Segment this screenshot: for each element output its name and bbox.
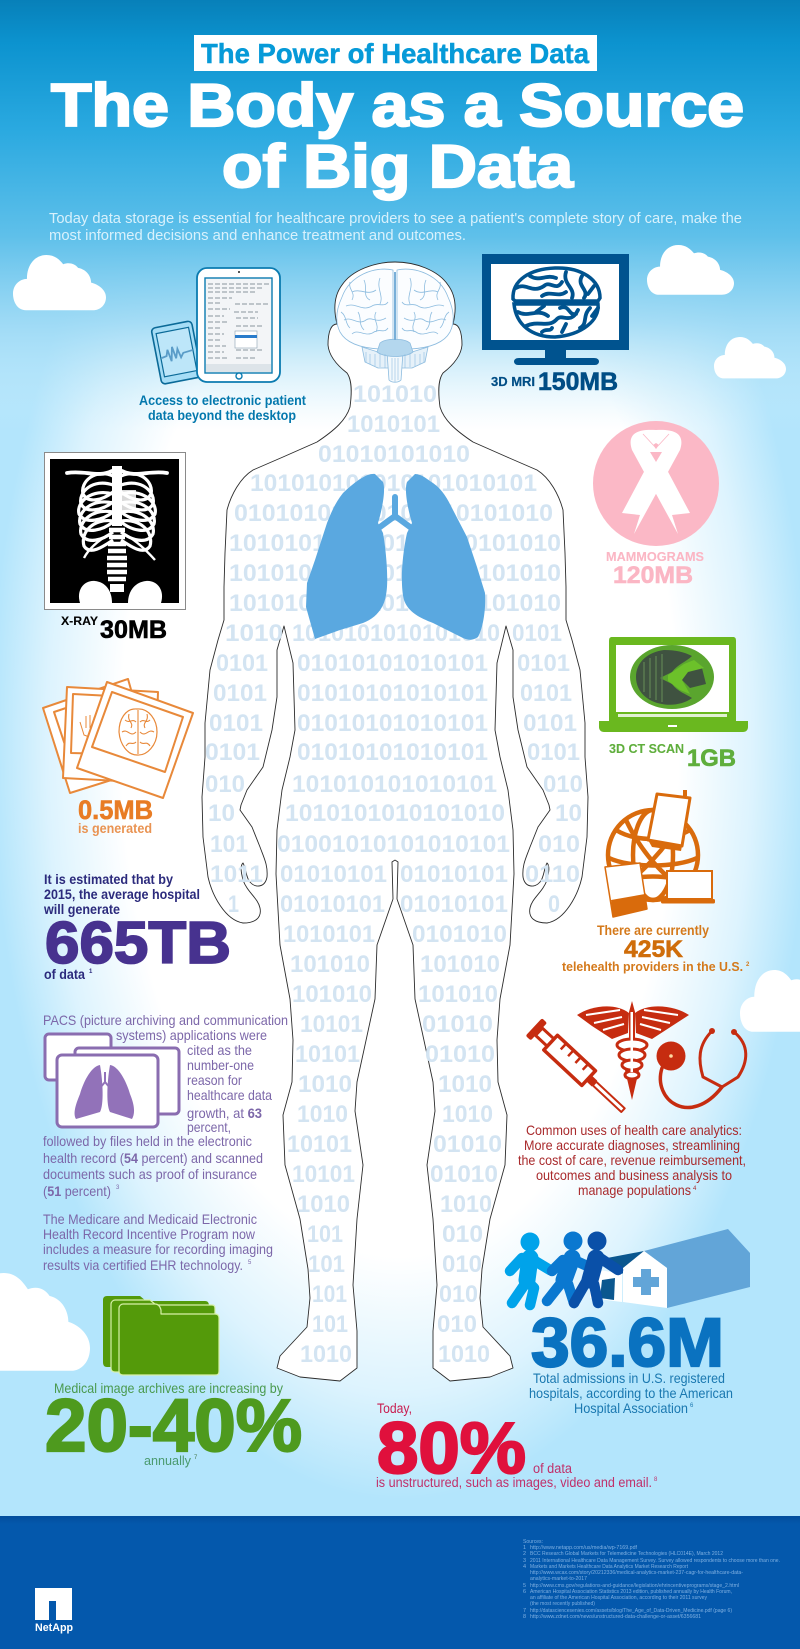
- stat: 665TB: 2015, the average hospital: [44, 887, 200, 902]
- binary code inside body: 0101: [512, 620, 562, 647]
- binary code inside body: 1010101010101010: [285, 800, 505, 827]
- label: 0.5MB is generated: 0.5MB: [78, 795, 153, 825]
- stat: 665TB: [43, 872, 231, 982]
- stat: 80% unstructured: 80%: [377, 1409, 526, 1489]
- binary code inside body: 0101010: [412, 921, 507, 948]
- footer band: [0, 1516, 800, 1649]
- text: health care analytics: outcomes and business analysis to: [536, 1167, 732, 1183]
- binary code inside body: [205, 381, 583, 1368]
- binary code inside body: 10: [208, 800, 235, 827]
- binary code inside body: 0101: [205, 739, 260, 766]
- binary code inside body: 0101: [209, 710, 263, 737]
- binary code inside body: 0: [548, 891, 560, 918]
- icon: syringe: [526, 1018, 631, 1119]
- binary code inside body: 010: [437, 1311, 477, 1338]
- binary code inside body: 1: [228, 891, 239, 918]
- binary code inside body: 101010101010101010101010: [229, 560, 561, 587]
- label: 3D CT scan 1GB: 3D CT SCAN: [609, 742, 684, 756]
- sources list: Markets and Markets Healthcare Data Analytics Market Research Report: [530, 1564, 688, 1570]
- binary code inside body: 1010101: [347, 411, 440, 438]
- sources list: http://www.zdnet.com/news/unstructured-data-challenge-or-asset/6356681: [530, 1614, 701, 1620]
- sources list: (the most recently published): [530, 1601, 595, 1607]
- sources list: http://www.wcax.com/story/20212336/medical-analytics-market-237-cagr-for-healthcare-data-: [530, 1570, 743, 1576]
- main heading: of Big Data: [222, 133, 574, 200]
- binary code inside body: 01010: [422, 1011, 493, 1038]
- caption: electronic patient data: data beyond the desktop: [148, 408, 296, 423]
- binary code inside body: 0101: [216, 650, 268, 677]
- stat: 36.6M admissions: Total admissions in U.S. registered: [533, 1370, 725, 1386]
- stat: image archives 20-40%: annually: [144, 1453, 191, 1468]
- sources list: Sources:: [523, 1539, 543, 1545]
- binary code inside body: 01010101010101: [297, 680, 488, 707]
- binary code inside body: 10: [555, 800, 582, 827]
- icon: tablets with patient data: [151, 268, 280, 384]
- binary code inside body: 01010101010101: [297, 739, 488, 766]
- sources list: [523, 1539, 780, 1620]
- lungs: [306, 474, 485, 640]
- binary code inside body: 01010101: [400, 891, 508, 918]
- label: mammograms 120MB: [606, 550, 704, 589]
- text: health care analytics: manage populations: [578, 1182, 691, 1198]
- sources list: 2011 International Healthcare Data Management Survey. Survey allowed respondents to choose more than one.: [530, 1558, 780, 1564]
- brain in head: [337, 269, 453, 382]
- binary code inside body: 101010: [353, 381, 437, 408]
- label: 3D CT scan 1GB: [609, 742, 736, 772]
- binary code inside body: 010: [205, 771, 245, 798]
- binary code inside body: 0101: [523, 710, 577, 737]
- icon: green folders: [103, 1296, 219, 1375]
- stat: image archives 20-40%: Medical image archives are increasing by: [54, 1380, 283, 1396]
- sources list: 4: [523, 1564, 526, 1570]
- sources list: BCC Research Global Markets for Telemedicine Technologies (HLC014E), March 2012: [530, 1551, 723, 1557]
- label: X-RAY 30MB: [61, 614, 167, 644]
- binary code inside body: 01010: [430, 1161, 498, 1188]
- binary code inside body: 101010101010101010101010: [229, 590, 561, 617]
- binary code inside body: 1010101010101010: [292, 620, 500, 647]
- text: Medicare and Medicaid program: 5: [248, 1260, 252, 1266]
- binary code inside body: 0101: [213, 680, 267, 707]
- label: 3D MRI 150MB: 3D MRI: [491, 374, 535, 389]
- binary code inside body: 0101: [527, 739, 580, 766]
- sources list: analytics-market-to-2017: [530, 1576, 587, 1582]
- text: PACS applications: followed by files held in the electronic: [43, 1133, 252, 1149]
- binary code inside body: 1011: [210, 861, 263, 888]
- binary code inside body: 101010: [418, 981, 498, 1008]
- main heading: The Body as a Source: [51, 72, 744, 139]
- stat: 36.6M admissions: Hospital Association: [574, 1400, 688, 1416]
- label: 425K telehealth providers: There are currently: [597, 923, 709, 938]
- sources list: 7: [523, 1608, 526, 1614]
- stat: image archives 20-40%: 20-40%: [45, 1384, 302, 1467]
- binary code inside body: 01010101010: [318, 441, 470, 468]
- binary code inside body: 010: [442, 1221, 483, 1248]
- binary code inside body: 010: [442, 1251, 482, 1278]
- stat: 665TB: 1: [89, 969, 93, 975]
- binary code inside body: 1010: [300, 1341, 352, 1368]
- text: Medicare and Medicaid program: [43, 1211, 273, 1273]
- label: mammograms 120MB: 120MB: [613, 562, 693, 589]
- binary code inside body: 101: [307, 1221, 343, 1248]
- binary code inside body: 1010: [298, 1071, 352, 1098]
- title tag: The Power of Healthcare Data: [201, 38, 589, 69]
- binary code inside body: 01001010101010101: [277, 831, 510, 858]
- binary code inside body: 01010101010101: [297, 650, 488, 677]
- icon: scan photos: [43, 679, 193, 798]
- label: 3D MRI 150MB: [491, 368, 618, 396]
- caption: electronic patient data: [139, 393, 306, 423]
- sources list: http://www.cms.gov/regulations-and-guidance/legislation/ehrincentiveprograms/stage_2.html: [530, 1583, 739, 1589]
- stat: 36.6M admissions: hospitals, according to the American: [529, 1385, 733, 1401]
- label: 425K telehealth providers: 2: [746, 962, 750, 968]
- cloud: right edge: [740, 970, 800, 1032]
- binary code inside body: 101: [312, 1281, 347, 1308]
- intro text: most informed decisions and enhance treatment and outcomes.: [49, 228, 466, 244]
- icon: CT scan laptop: [599, 637, 748, 732]
- binary code inside body: 1010: [440, 1191, 492, 1218]
- text: PACS applications: growth, at 63: [187, 1105, 262, 1121]
- label: 425K telehealth providers: telehealth providers in the U.S.: [562, 959, 743, 974]
- stat: image archives 20-40%: 7: [194, 1455, 198, 1461]
- label: 425K telehealth providers: 425K: [624, 936, 684, 963]
- icon: hospital and patients: [510, 1229, 750, 1308]
- sources list: 2: [523, 1551, 526, 1557]
- binary code inside body: 01010101: [280, 861, 387, 888]
- text: PACS applications: number-one: [187, 1057, 254, 1073]
- binary code inside body: 01010101010101: [297, 710, 488, 737]
- sources list: 6: [523, 1589, 526, 1595]
- binary code inside body: 101010101010101: [292, 771, 497, 798]
- stat: 665TB: It is estimated that by: [44, 872, 173, 887]
- main heading: [51, 72, 744, 200]
- sources list: 8: [523, 1614, 526, 1620]
- text: health care analytics: More accurate diagnoses, streamlining: [524, 1137, 740, 1153]
- binary code inside body: 101010: [290, 951, 370, 978]
- intro text: [49, 211, 742, 244]
- binary code inside body: 10101: [295, 1041, 360, 1068]
- stat: 36.6M admissions: 36.6M: [531, 1304, 724, 1381]
- icon: caduceus: [577, 1001, 689, 1100]
- sources list: 5: [523, 1583, 526, 1589]
- icon: stethoscope: [656, 1028, 746, 1107]
- label: 0.5MB is generated: is generated: [78, 821, 152, 836]
- icon: lung image cards: [45, 1034, 179, 1127]
- sources list: an affiliate of the American Hospital Association, according to their 2011 survey: [530, 1595, 707, 1601]
- text: PACS applications: health record (54 percent) and scanned: [43, 1150, 263, 1166]
- text: PACS applications: systems) applications were: [116, 1027, 267, 1043]
- binary code inside body: 1010: [225, 620, 283, 647]
- icon: telehealth globe and devices: [605, 790, 715, 917]
- intro text: Today data storage is essential for healthcare providers to see a patient's complete story of care, make the: [49, 211, 742, 227]
- sources list: http://datasciencesenies.com/assets/blog/The_Age_of_Data-Driven_Medicine.pdf (page 6): [530, 1608, 732, 1614]
- cloud: lower left: [0, 1273, 90, 1371]
- cloud: far right: [714, 337, 786, 378]
- logo: NetApp: NetApp: [35, 1622, 73, 1634]
- text: health care analytics: [518, 1122, 746, 1198]
- text: Medicare and Medicaid program: The Medicare and Medicaid Electronic: [43, 1211, 257, 1227]
- binary code inside body: 101010: [420, 951, 500, 978]
- label: 3D MRI 150MB: 150MB: [538, 368, 618, 396]
- label: mammograms 120MB: MAMMOGRAMS: [606, 550, 704, 564]
- stat: 80% unstructured: 8: [654, 1477, 658, 1483]
- text: Medicare and Medicaid program: includes a measure for recording imaging: [43, 1241, 273, 1257]
- binary code inside body: 1010: [297, 1101, 348, 1128]
- sources list: American Hospital Association Statistics 2013 edition, published annually by Health Forum,: [530, 1589, 732, 1595]
- label: 425K telehealth providers: [562, 923, 750, 974]
- text: PACS applications: 3: [116, 1185, 120, 1191]
- binary code inside body: 010: [439, 1281, 478, 1308]
- text: PACS applications: documents such as proof of insurance: [43, 1166, 257, 1182]
- binary code inside body: 0101: [517, 650, 570, 677]
- text: PACS applications: healthcare data: [187, 1087, 272, 1103]
- human body outline: [202, 262, 588, 1381]
- logo: NetApp: [35, 1588, 73, 1634]
- binary code inside body: 101010: [292, 981, 372, 1008]
- binary code inside body: 10101: [300, 1011, 363, 1038]
- binary code inside body: 01010: [425, 1041, 495, 1068]
- binary code inside body: 1010: [438, 1071, 492, 1098]
- text: Medicare and Medicaid program: Health Record Incentive Program now: [43, 1226, 256, 1242]
- stat: 36.6M admissions: [529, 1304, 733, 1416]
- binary code inside body: 10101: [292, 1161, 355, 1188]
- label: X-RAY 30MB: 30MB: [100, 616, 167, 644]
- binary code inside body: 0110: [525, 861, 580, 888]
- text: health care analytics: Common uses of health care analytics:: [526, 1122, 742, 1138]
- text: PACS applications: cited as the: [187, 1042, 252, 1058]
- binary code inside body: 01010: [433, 1131, 502, 1158]
- binary code inside body: 1010101: [283, 921, 375, 948]
- binary code inside body: 101010101010101010101010: [229, 530, 561, 557]
- stat: 665TB: will generate: [43, 902, 120, 917]
- stat: 665TB: 665TB: [45, 910, 231, 976]
- sources list: 3: [523, 1558, 526, 1564]
- cloud: upper right: [647, 245, 734, 295]
- binary code inside body: 1010: [297, 1191, 350, 1218]
- stat: 665TB: of data: [44, 967, 85, 982]
- text: health care analytics: 4: [693, 1186, 697, 1192]
- label: 3D CT scan 1GB: 1GB: [687, 745, 736, 772]
- binary code inside body: 1010: [438, 1341, 490, 1368]
- binary code inside body: 010: [538, 831, 580, 858]
- text: Medicare and Medicaid program: results via certified EHR technology.: [43, 1257, 243, 1273]
- binary code inside body: 101010101010101010101: [250, 470, 537, 497]
- icon: x-ray: [44, 452, 186, 610]
- stat: 80% unstructured: of data: [533, 1461, 572, 1476]
- sources list: http://www.netapp.com/us/media/wp-7169.pdf: [530, 1545, 637, 1551]
- icon: mammogram ribbon: [593, 421, 719, 546]
- label: X-RAY 30MB: X-RAY: [61, 614, 98, 628]
- stat: 36.6M admissions: 6: [690, 1403, 694, 1409]
- sources list: 1: [523, 1545, 526, 1551]
- binary code inside body: 010: [543, 771, 583, 798]
- binary code inside body: 101: [312, 1311, 348, 1338]
- stat: 80% unstructured: is unstructured, such as images, video and email.: [376, 1475, 652, 1490]
- text: PACS applications: (51 percent): [43, 1183, 111, 1199]
- binary code inside body: 01010101: [280, 891, 385, 918]
- caption: electronic patient data: Access to electronic patient: [139, 393, 306, 408]
- text: PACS applications: percent,: [187, 1119, 231, 1135]
- binary code inside body: 10101: [287, 1131, 352, 1158]
- text: PACS applications: [43, 1012, 288, 1199]
- text: health care analytics: the cost of care, revenue reimbursement,: [518, 1152, 746, 1168]
- cloud: upper left: [13, 255, 106, 310]
- binary code inside body: 101: [308, 1251, 345, 1278]
- icon: MRI monitor: [482, 254, 629, 365]
- binary code inside body: 01010101: [400, 861, 508, 888]
- binary code inside body: 0101: [520, 680, 572, 707]
- binary code inside body: 1010: [442, 1101, 493, 1128]
- stat: 80% unstructured: Today,: [377, 1401, 412, 1416]
- stat: 80% unstructured: [376, 1401, 658, 1490]
- text: PACS applications: PACS (picture archiving and communication: [43, 1012, 288, 1028]
- binary code inside body: 01010101010101010101010: [234, 500, 553, 527]
- text: PACS applications: reason for: [187, 1072, 242, 1088]
- binary code inside body: 101: [210, 831, 248, 858]
